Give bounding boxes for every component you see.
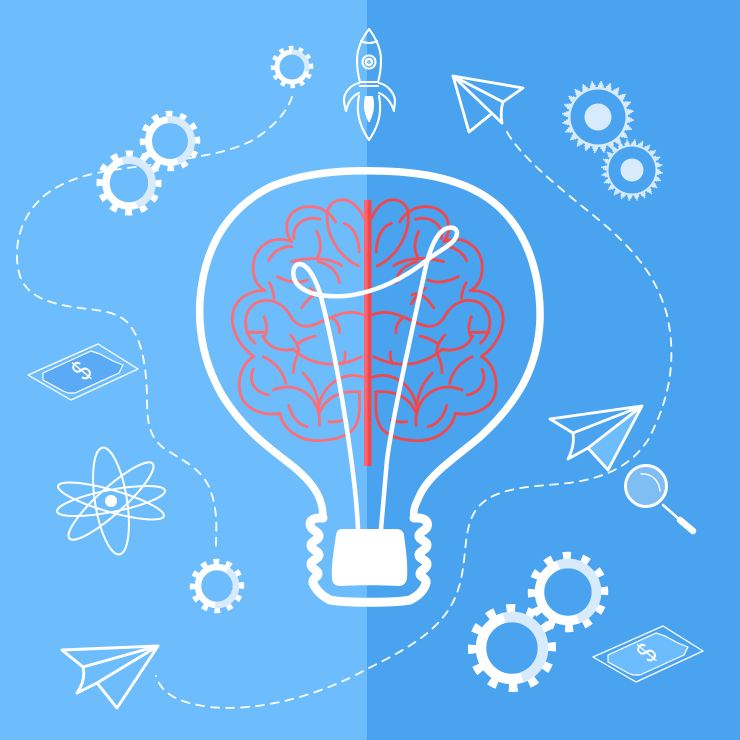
brain: left hemisphere — [232, 200, 364, 441]
icon: paper plane bottom left — [62, 646, 158, 708]
gear: bottom right upper — [527, 551, 609, 633]
gear: bottom left — [190, 559, 244, 613]
bulb screw thread and base — [310, 518, 427, 602]
brain: right hemisphere — [371, 200, 503, 441]
icon: atom — [55, 445, 167, 557]
icon: dollar bill right — [593, 626, 703, 682]
bulb socket — [332, 529, 407, 586]
brain: centre divider — [364, 200, 372, 466]
icon: paper plane right — [550, 406, 642, 470]
icon: dollar bill left — [28, 344, 138, 400]
icon: paper plane top — [453, 76, 523, 132]
serrated gear: top right small — [600, 138, 664, 202]
background right panel — [367, 0, 740, 740]
icon: rocket — [344, 29, 395, 140]
light bulb — [200, 171, 540, 602]
background left panel — [0, 0, 367, 740]
bulb glass outline — [200, 171, 540, 517]
dashed path: right route — [156, 132, 671, 708]
gear: bottom right lower — [467, 603, 557, 693]
dashed path: left route — [17, 97, 292, 546]
icon: dollar bill left: $ — [64, 355, 99, 387]
serrated gear: top right large — [561, 80, 635, 154]
icon: dollar bill right: $ — [629, 637, 664, 669]
brain — [232, 200, 503, 466]
gear: top pair upper — [140, 111, 200, 171]
gear: top pair lower — [97, 151, 161, 215]
gear: small top — [271, 46, 313, 88]
bulb filament — [293, 228, 457, 529]
icon: magnifying glass — [626, 466, 693, 531]
